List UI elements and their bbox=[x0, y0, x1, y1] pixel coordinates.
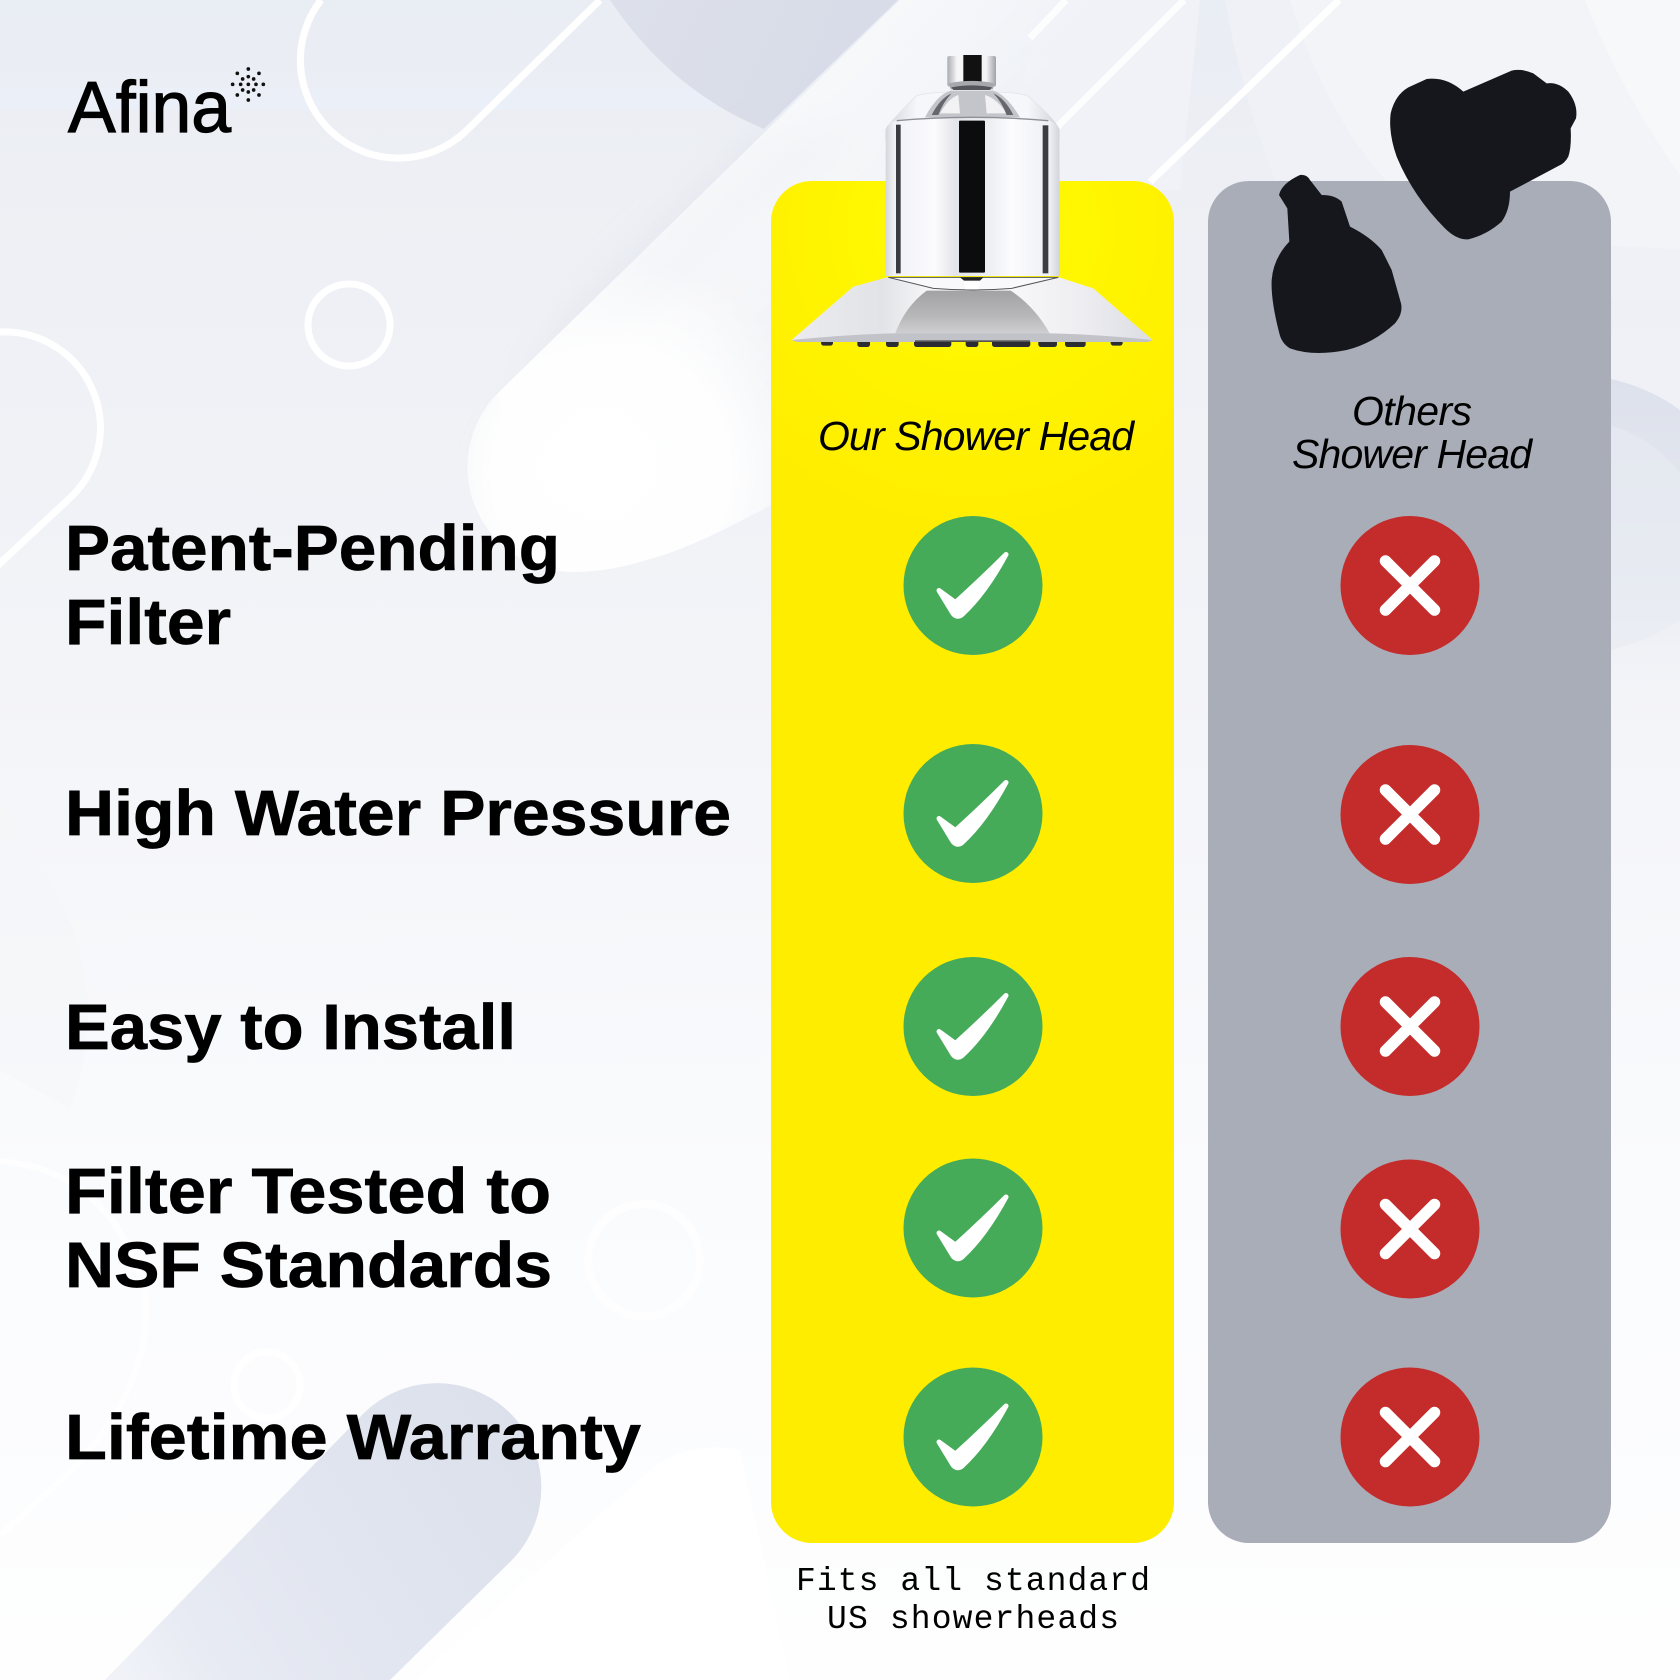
cross row 3 bbox=[1340, 957, 1480, 1096]
feature: Easy to Install: Easy to Install bbox=[65, 991, 516, 1063]
check row 5 bbox=[904, 1368, 1042, 1506]
logo: Afina bbox=[68, 67, 265, 148]
feature: High Water Pressure: High Water Pressure bbox=[65, 777, 731, 849]
icon: shower head silhouettes bbox=[1272, 70, 1576, 353]
product image: chrome shower head bbox=[792, 55, 1153, 347]
yellow panel background bbox=[771, 181, 1174, 1543]
feature: Patent-Pending Filter: Filter bbox=[65, 586, 231, 658]
check row 4 bbox=[904, 1158, 1042, 1298]
column label: Others Shower Head: Others bbox=[1352, 388, 1472, 434]
feature: Patent-Pending Filter: Patent-Pending bbox=[65, 512, 560, 584]
check row 1 bbox=[904, 516, 1042, 655]
feature: Patent-Pending Filter bbox=[65, 512, 560, 658]
logo dots bbox=[231, 67, 265, 102]
cross row 1 bbox=[1340, 516, 1480, 655]
feature: Filter Tested to NSF Standards bbox=[65, 1155, 552, 1301]
feature list bbox=[65, 512, 731, 1473]
check row 3 bbox=[904, 957, 1042, 1096]
column label: Others Shower Head: Shower Head bbox=[1292, 431, 1533, 477]
panel: others shower head bbox=[1208, 70, 1611, 1543]
footnote: Fits all standard US showerheads: Fits all standard bbox=[796, 1563, 1150, 1600]
gray panel background bbox=[1208, 181, 1611, 1543]
check row 2 bbox=[904, 744, 1042, 883]
panel: our shower head bbox=[771, 55, 1174, 1543]
feature: Filter Tested to NSF Standards: NSF Standards bbox=[65, 1229, 552, 1301]
footnote: Fits all standard US showerheads bbox=[796, 1563, 1150, 1638]
logo wordmark: Afina bbox=[68, 68, 232, 148]
cross row 2 bbox=[1340, 745, 1480, 884]
cross row 5 bbox=[1340, 1368, 1480, 1506]
feature: Lifetime Warranty: Lifetime Warranty bbox=[65, 1401, 641, 1473]
footnote: Fits all standard US showerheads: US showerheads bbox=[827, 1601, 1119, 1638]
column label: Our Shower Head: Our Shower Head bbox=[818, 413, 1135, 459]
column label: Others Shower Head bbox=[1292, 388, 1533, 477]
cross row 4 bbox=[1340, 1160, 1480, 1298]
feature: Filter Tested to NSF Standards: Filter Tested to bbox=[65, 1155, 551, 1227]
